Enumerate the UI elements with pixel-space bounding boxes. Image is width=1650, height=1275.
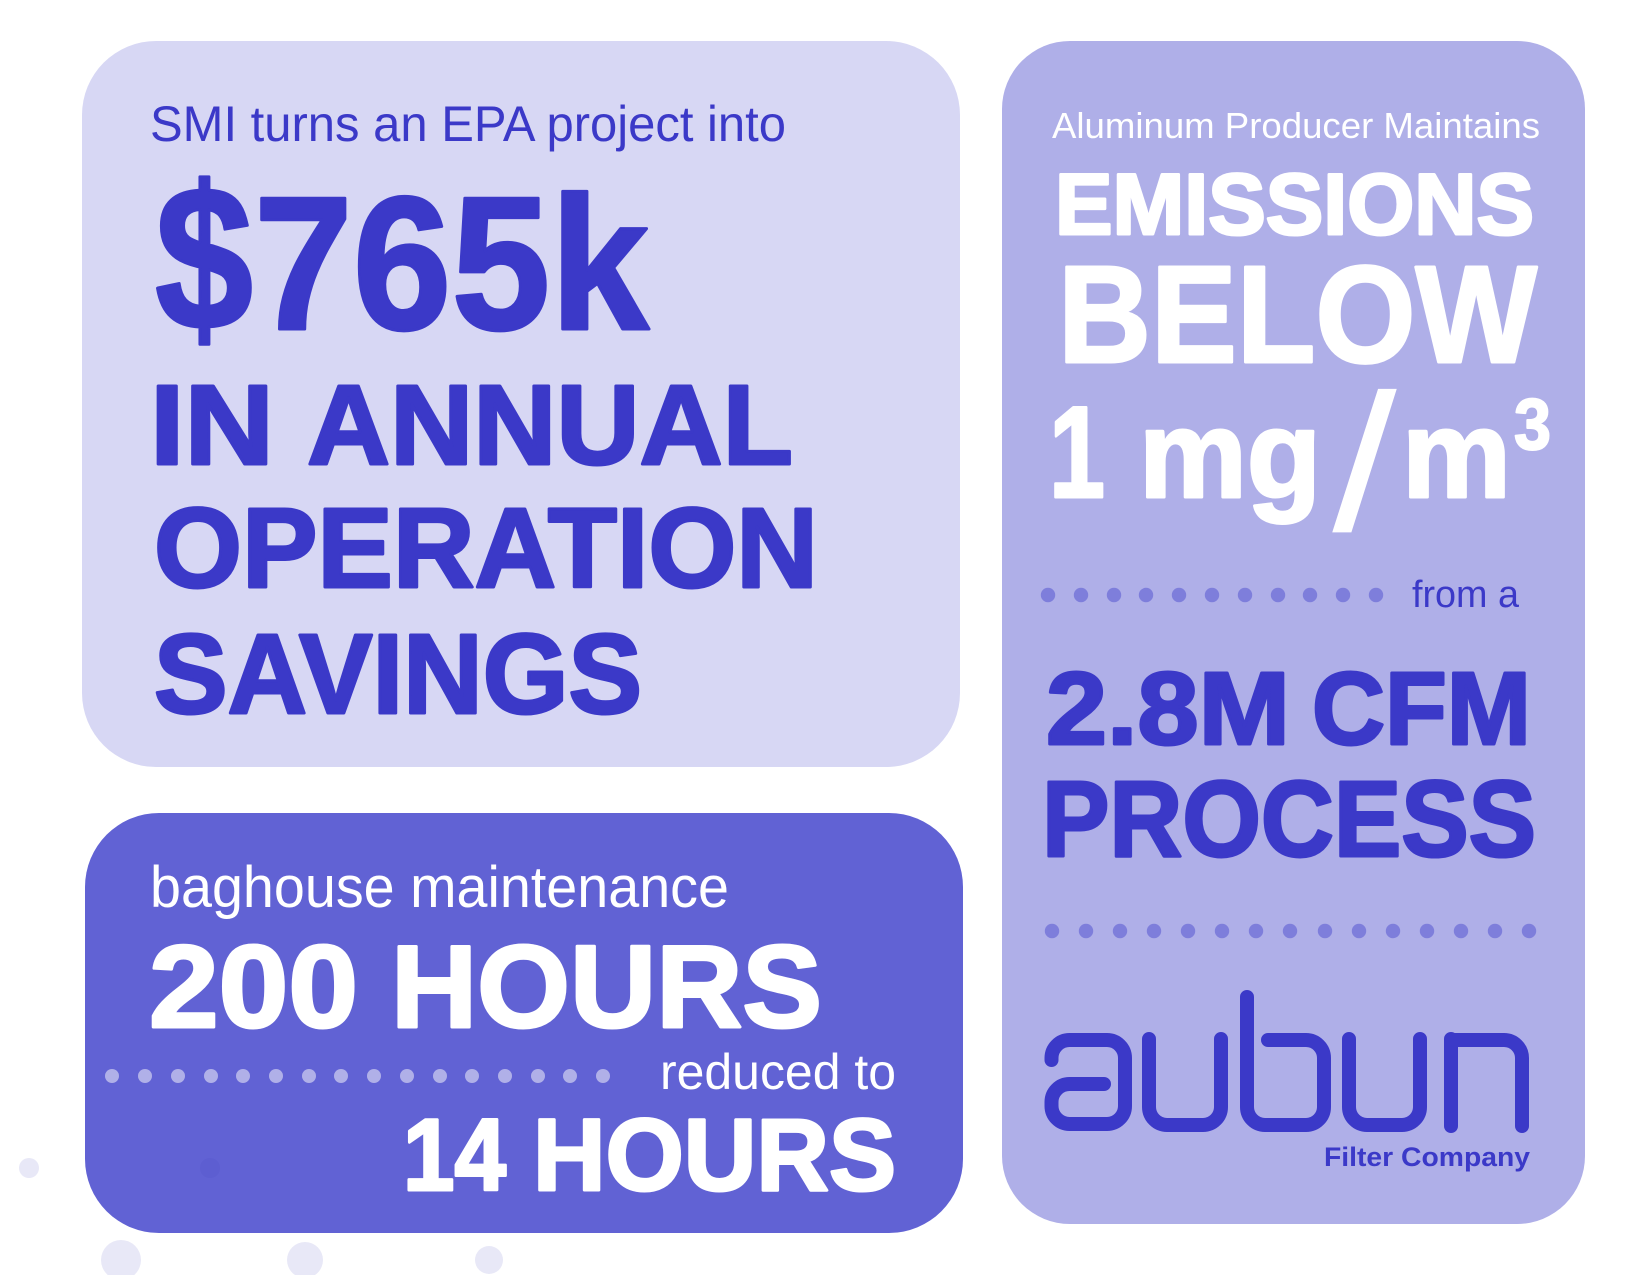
heading: emissions: EMISSIONS xyxy=(1055,157,1534,253)
panel background xyxy=(85,813,963,1233)
big number: $765k: 765k xyxy=(254,158,649,370)
heading: operation: OPERATION xyxy=(154,485,818,611)
heading: process: PROCESS xyxy=(1042,758,1536,879)
figure: 2.8M CFM: CFM xyxy=(1312,651,1531,766)
faint dot inside panel xyxy=(200,1158,220,1178)
logo wordmark: Filter Company xyxy=(1324,1142,1530,1172)
figure: 200 hours: 200 xyxy=(149,921,358,1052)
big number: $765k: $ xyxy=(155,144,253,373)
figure: 2.8M CFM: 2.8M xyxy=(1046,651,1290,766)
panel: baghouse maintenance xyxy=(85,813,963,1233)
panel: emissions xyxy=(1002,41,1585,1224)
label: baghouse maintenance: baghouse maintenance xyxy=(150,855,729,920)
figure: 200 hours: HOURS xyxy=(391,921,822,1052)
intro text: SMI turns an EPA project into xyxy=(150,96,786,152)
panel background xyxy=(1002,41,1585,1224)
label: from a: from a xyxy=(1412,574,1520,616)
panel background xyxy=(82,41,960,767)
dotted divider xyxy=(1045,924,1536,938)
figure: 1 mg/m3: mg xyxy=(1139,386,1321,524)
figure: 200 hours xyxy=(149,921,822,1052)
panel: annual savings xyxy=(82,41,960,767)
heading: below: BELOW xyxy=(1058,238,1538,392)
heading: savings: SAVINGS xyxy=(154,611,642,737)
figure: 1 mg/m3: m xyxy=(1402,386,1511,524)
dotted connector xyxy=(1041,588,1383,602)
logo: aubun Filter Company xyxy=(1052,997,1530,1172)
heading: in annual: ANNUAL xyxy=(307,362,793,488)
figure: 1 mg/m3: 1 xyxy=(1049,379,1105,525)
dotted connector xyxy=(105,1069,610,1083)
figure: 1 mg/m3: 3 xyxy=(1514,385,1551,465)
figure: 1 mg/m3: / xyxy=(1333,355,1396,572)
label: reduced to: reduced to xyxy=(660,1044,896,1100)
figure: 2.8M CFM xyxy=(1046,651,1531,766)
figure: 14 hours: 14 xyxy=(403,1098,506,1212)
heading: in annual: IN xyxy=(150,362,274,488)
figure: 14 hours: HOURS xyxy=(533,1098,896,1212)
decorative background dots xyxy=(19,1158,503,1275)
logo mark xyxy=(1052,997,1522,1126)
figure: 1 mg/m3 xyxy=(1049,355,1551,572)
intro text: Aluminum Producer Maintains xyxy=(1052,105,1540,146)
